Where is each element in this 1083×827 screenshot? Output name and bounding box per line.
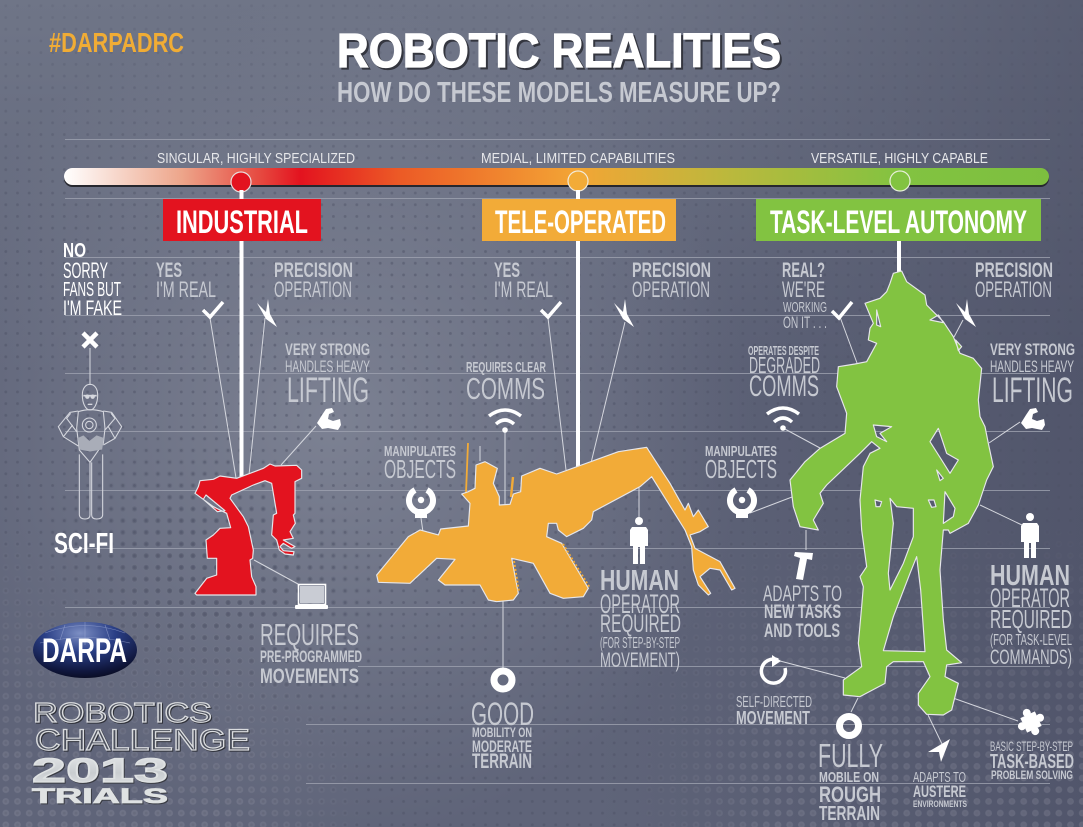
robot: industrial arm <box>195 464 302 595</box>
icon: laptop <box>295 584 328 609</box>
marker: industrial <box>231 172 251 192</box>
text: good mobility: TERRAIN <box>472 750 532 773</box>
icon: hammer <box>794 552 813 580</box>
icon: wifi <box>767 408 799 431</box>
title: ROBOTIC REALITIES <box>337 25 781 78</box>
text: human operator: (FOR STEP-BY-STEP <box>600 635 680 652</box>
text: requires comms <box>466 359 546 406</box>
subtitle: HOW DO THESE MODELS MEASURE UP? <box>337 77 781 109</box>
text: good mobility: GOOD <box>471 696 534 732</box>
text: real working <box>782 259 827 332</box>
text: yes real: YES <box>494 259 520 282</box>
text: real working: WE'RE <box>782 277 825 302</box>
heading: industrial <box>163 199 321 241</box>
heading: tele-operated <box>482 199 676 241</box>
logo: Robotics Challenge 2013 Trials: 2013 <box>32 752 168 790</box>
text: degraded comms: COMMS <box>749 370 819 403</box>
text: austere: ENVIRONMENTS <box>913 799 967 810</box>
text: requires movements: PRE-PROGRAMMED <box>260 647 362 666</box>
text: human operator: MOVEMENT) <box>600 649 680 672</box>
text: austere <box>913 769 967 810</box>
connector lines <box>210 318 316 584</box>
text: austere: AUSTERE <box>913 782 966 801</box>
text: adapts tools: ADAPTS TO <box>763 581 842 606</box>
text: human operator: OPERATOR <box>600 589 680 619</box>
text: manipulates objects <box>384 443 456 484</box>
connector lines <box>421 318 639 668</box>
no sorry text <box>63 240 122 320</box>
text: good mobility <box>471 696 534 773</box>
text: self-directed: MOVEMENT <box>736 708 810 728</box>
icon: gripper <box>614 299 634 327</box>
icon: puzzle piece <box>1012 703 1050 741</box>
icon: rotate arrow <box>761 655 785 683</box>
text: manipulates objects: MANIPULATES <box>705 443 777 460</box>
text: very strong: VERY STRONG <box>285 340 370 359</box>
no sorry text: NO <box>63 240 86 262</box>
text: requires comms: COMMS <box>466 371 545 406</box>
text: degraded comms <box>748 343 820 403</box>
icon: manipulator <box>730 490 754 518</box>
text: yes real: I'M REAL <box>494 277 553 302</box>
icon: check <box>832 302 852 318</box>
text: yes real: I'M REAL <box>156 277 216 302</box>
text: precision: PRECISION <box>274 259 353 282</box>
logo: Robotics Challenge 2013 Trials: CHALLENGE <box>35 724 250 757</box>
logo: Robotics Challenge 2013 Trials: ROBOTICS <box>33 697 212 728</box>
text: fully mobile <box>818 737 883 825</box>
robot: humanoid <box>790 271 993 715</box>
heading: industrial: INDUSTRIAL <box>176 204 308 240</box>
text: requires movements: REQUIRES <box>260 617 359 652</box>
marker: tele-operated <box>568 171 588 191</box>
text: precision: OPERATION <box>274 277 352 302</box>
icon: gripper <box>257 299 277 327</box>
text: very strong <box>990 340 1075 410</box>
text: human operator <box>600 565 681 672</box>
text: precision: PRECISION <box>632 259 711 282</box>
text: very strong: LIFTING <box>287 371 369 410</box>
text: adapts tools <box>763 581 842 642</box>
text: real working: WORKING <box>783 299 827 316</box>
text: fully mobile: TERRAIN <box>819 803 880 825</box>
icon: muscle <box>317 408 341 430</box>
panel: tele-operated <box>377 190 735 773</box>
text: yes real <box>156 259 216 302</box>
text: manipulates objects: MANIPULATES <box>384 443 456 460</box>
icon: person <box>1021 513 1039 558</box>
text: adapts tools: NEW TASKS <box>764 602 841 623</box>
icon: wheel ring <box>840 716 858 736</box>
text: human operator: HUMAN <box>600 565 679 597</box>
text: precision: OPERATION <box>632 277 710 302</box>
text: self-directed: SELF-DIRECTED <box>736 694 812 711</box>
scale label: versatile: VERSATILE, HIGHLY CAPABLE <box>811 151 988 167</box>
text: degraded comms: OPERATES DESPITE <box>748 343 819 358</box>
text: task-based <box>990 738 1074 782</box>
text: very strong: HANDLES HEAVY <box>285 357 370 376</box>
text: degraded comms: DEGRADED <box>749 352 820 378</box>
text: precision <box>274 259 353 302</box>
text: good mobility: MODERATE <box>472 737 532 756</box>
text: very strong <box>285 340 370 410</box>
text: fully mobile: ROUGH <box>819 782 881 807</box>
heading: tele-operated: TELE-OPERATED <box>495 204 666 240</box>
icon: navigation arrow <box>928 739 950 762</box>
icon: gripper <box>956 299 976 327</box>
panel: sci-fi <box>54 240 122 560</box>
text: human operator: REQUIRED <box>600 610 681 638</box>
heading: sci-fi: SCI-FI <box>54 528 114 560</box>
text: requires comms: REQUIRES CLEAR <box>466 359 546 376</box>
text: yes real <box>494 259 553 302</box>
text: manipulates objects: OBJECTS <box>705 454 777 484</box>
text: requires movements: MOVEMENTS <box>260 665 359 688</box>
panel: task-level autonomy <box>705 199 1075 825</box>
icon: check <box>541 302 561 317</box>
logo: Robotics Challenge 2013 Trials: TRIALS <box>32 785 168 808</box>
icon: C-3PO outline <box>58 384 122 519</box>
text: self-directed <box>736 694 812 728</box>
hashtag: #DARPADRC <box>49 27 184 58</box>
capability scale <box>64 151 1049 192</box>
logo: DARPA: DARPA <box>42 632 127 670</box>
text: precision <box>975 259 1053 302</box>
text: fully mobile: FULLY <box>818 737 883 774</box>
panel: industrial <box>156 190 370 688</box>
text: manipulates objects: OBJECTS <box>384 454 456 484</box>
icon: cross <box>83 333 97 347</box>
text: austere: ADAPTS TO <box>913 769 966 786</box>
icon: manipulator <box>409 490 433 518</box>
scale label: medial: MEDIAL, LIMITED CAPABILITIES <box>481 151 675 167</box>
no sorry text: I'M FAKE <box>63 297 122 320</box>
text: precision <box>632 259 711 302</box>
text: good mobility: MOBILITY ON <box>472 724 532 740</box>
text: real working: REAL? <box>782 259 825 282</box>
icon: muscle <box>1021 408 1045 430</box>
no sorry text: SORRY <box>63 258 108 283</box>
robot: tele-operated vehicle <box>377 443 735 602</box>
logo: Robotics Challenge 2013 Trials <box>32 697 250 808</box>
icon: wifi <box>489 410 521 433</box>
icon: person <box>630 517 648 564</box>
text: yes real: YES <box>156 259 182 282</box>
icon: check <box>203 302 223 317</box>
logo: DARPA <box>33 622 137 678</box>
text: human operator <box>990 560 1072 669</box>
text: requires movements <box>260 617 362 688</box>
connector lines <box>750 317 1022 744</box>
text: manipulates objects <box>705 443 777 484</box>
text: adapts tools: AND TOOLS <box>764 621 840 642</box>
icon: wheel ring <box>494 671 512 689</box>
no sorry text: FANS BUT <box>63 279 121 301</box>
text: real working: ON IT . . . <box>783 313 827 332</box>
scale label: singular: SINGULAR, HIGHLY SPECIALIZED <box>157 151 355 167</box>
marker: task-level <box>890 171 910 191</box>
text: fully mobile: MOBILE ON <box>819 769 879 786</box>
